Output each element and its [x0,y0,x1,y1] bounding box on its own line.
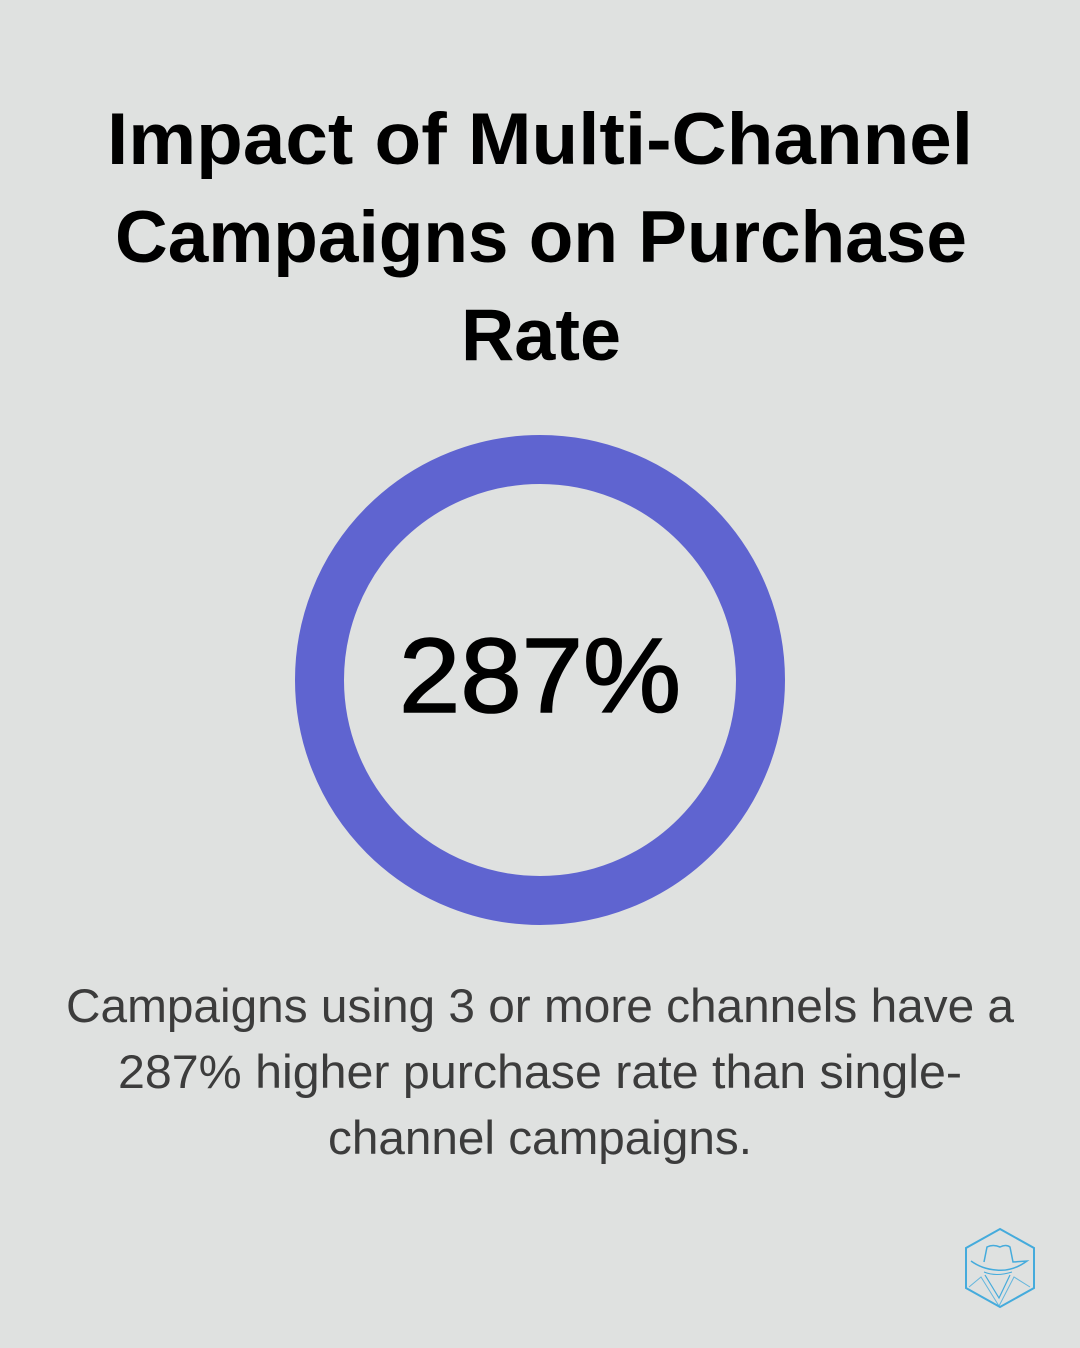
title: Rate [461,295,621,376]
description text: channel campaigns. [328,1111,752,1164]
title [107,99,973,376]
description text: 287% higher purchase rate than single- [118,1045,962,1098]
title: Campaigns on Purchase [115,197,967,278]
value: 287%: 287% [399,617,681,735]
description text: Campaigns using 3 or more channels have a [66,979,1015,1032]
title: Impact of Multi-Channel [107,99,973,180]
donut ring [320,460,760,900]
description text [66,979,1015,1164]
icon: logo, hexagon with spy in hat [966,1229,1034,1307]
